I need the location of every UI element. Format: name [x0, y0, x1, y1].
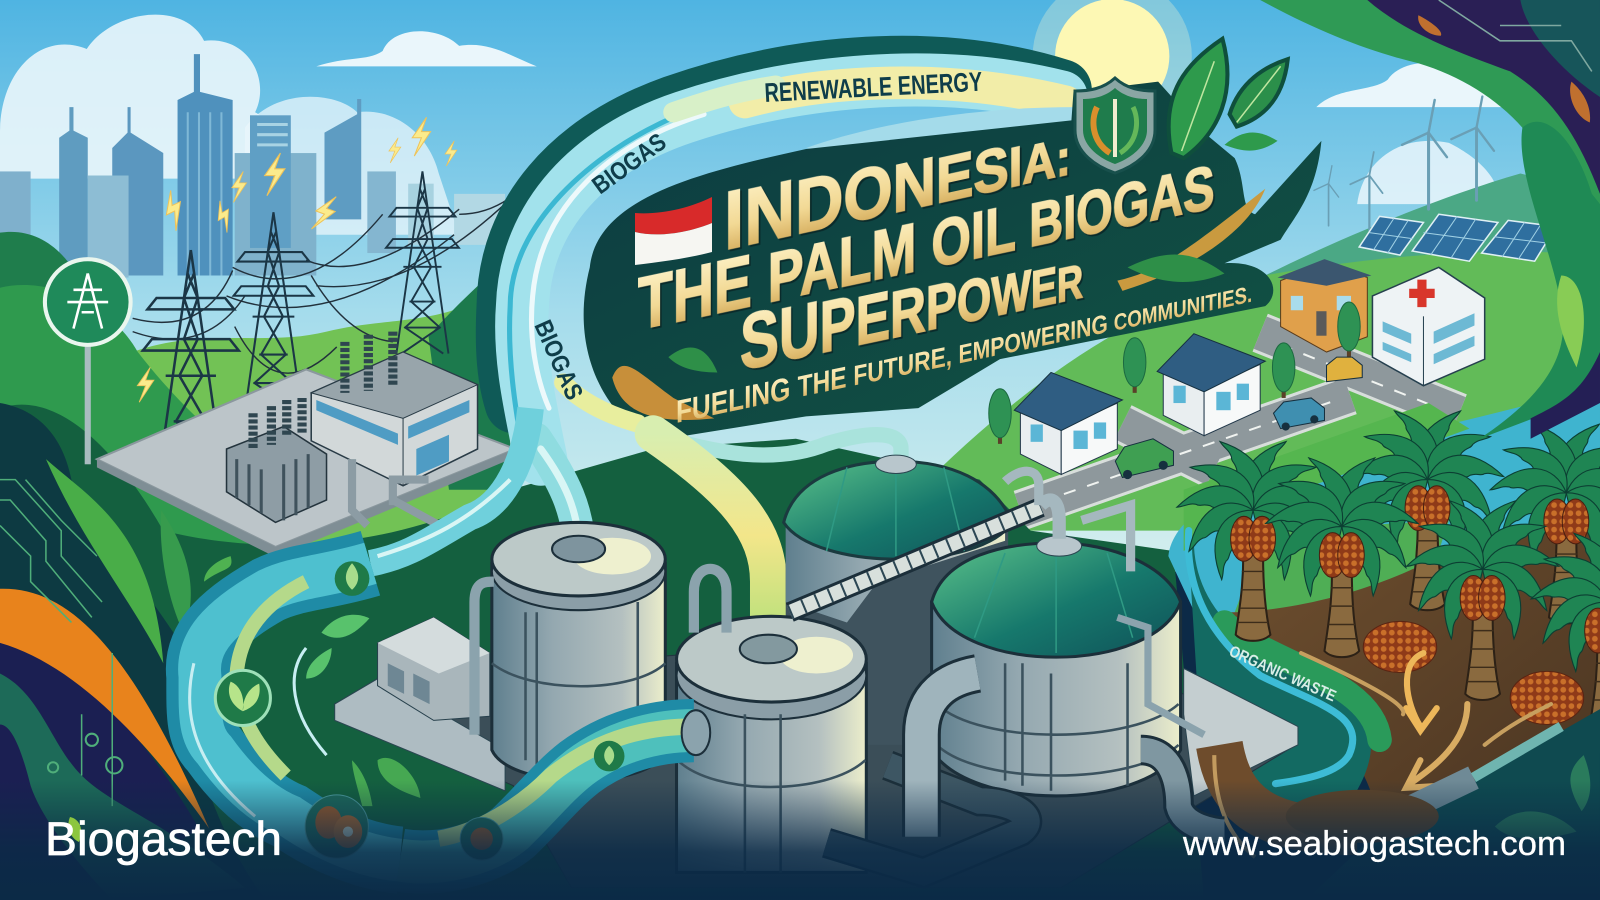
left circuit panel: [0, 403, 265, 900]
right hills: [898, 173, 1600, 531]
tank right: [932, 536, 1181, 796]
label: renewable energy: RENEWABLE ENERGY: [764, 67, 983, 108]
top right swirl: [1260, 0, 1600, 439]
biogas stream upper: [506, 66, 1066, 459]
subtitle: FUELING THE FUTURE, EMPOWERING COMMUNITIES.: [676, 273, 1252, 431]
title: indonesia: INDONESIA:: [724, 98, 1071, 268]
sky: [0, 0, 1600, 571]
logo: biogastech: Biogastech: [45, 812, 282, 865]
sky wedge above banner: [806, 107, 1073, 155]
website url: www.seabiogastech.com: [1182, 825, 1566, 863]
banner leaves: [612, 39, 1288, 420]
tank back: [784, 455, 1012, 745]
title: the palm oil biogas: THE PALM OIL BIOGAS: [638, 142, 1215, 347]
palm plantation soil: [1230, 510, 1600, 816]
organic waste river: [1188, 531, 1380, 806]
hospital building: [1372, 267, 1485, 386]
crest shield: [1075, 78, 1155, 173]
wind turbines: [1314, 97, 1494, 231]
cars: [1115, 357, 1362, 479]
city skyline: [0, 54, 505, 278]
control building: [378, 617, 490, 720]
tank left: [474, 522, 665, 781]
pipe and lower right ground: [1306, 709, 1600, 900]
bottom fade: [0, 781, 1600, 900]
label: biogas upper: BIOGAS: [587, 128, 671, 200]
palm fruit bunches: [1363, 621, 1584, 724]
title: superpower: SUPERPOWER: [740, 226, 1083, 387]
clouds: [0, 15, 1531, 235]
lawn strip along road: [1184, 403, 1469, 551]
palm trees: [1177, 402, 1600, 733]
lightning bolts: [137, 117, 457, 402]
label: organic waste: ORGANIC WASTE: [1226, 643, 1339, 706]
lower left stream: [190, 408, 531, 860]
biogas stream lower with tank outflows: [536, 383, 901, 638]
stream across tank base: [400, 710, 710, 862]
banner: [584, 82, 1321, 441]
grid sign icon: [45, 259, 131, 464]
gantry and pipes: [694, 471, 1224, 872]
tank middle front: [677, 616, 866, 872]
power lines: [133, 194, 515, 373]
waste sludge outflow: [1214, 745, 1439, 857]
sun: [1033, 0, 1192, 136]
plant platform: [335, 653, 1298, 888]
bottom right leaves: [1495, 755, 1590, 839]
blue river behind palms: [1168, 386, 1600, 633]
pylons: [143, 171, 459, 490]
label: biogas lower: BIOGAS: [529, 316, 588, 404]
roads: [1020, 333, 1459, 510]
left hills: [0, 232, 510, 612]
substation: [97, 332, 515, 557]
stream icons: [215, 561, 420, 806]
houses: [989, 302, 1360, 474]
solar panels: [1359, 214, 1556, 261]
flow arrows in soil: [1301, 653, 1551, 788]
lower land dark green: [0, 405, 1204, 900]
school building: [1278, 259, 1371, 352]
stream seed icons: [305, 741, 624, 860]
indonesian flag: [635, 197, 712, 265]
